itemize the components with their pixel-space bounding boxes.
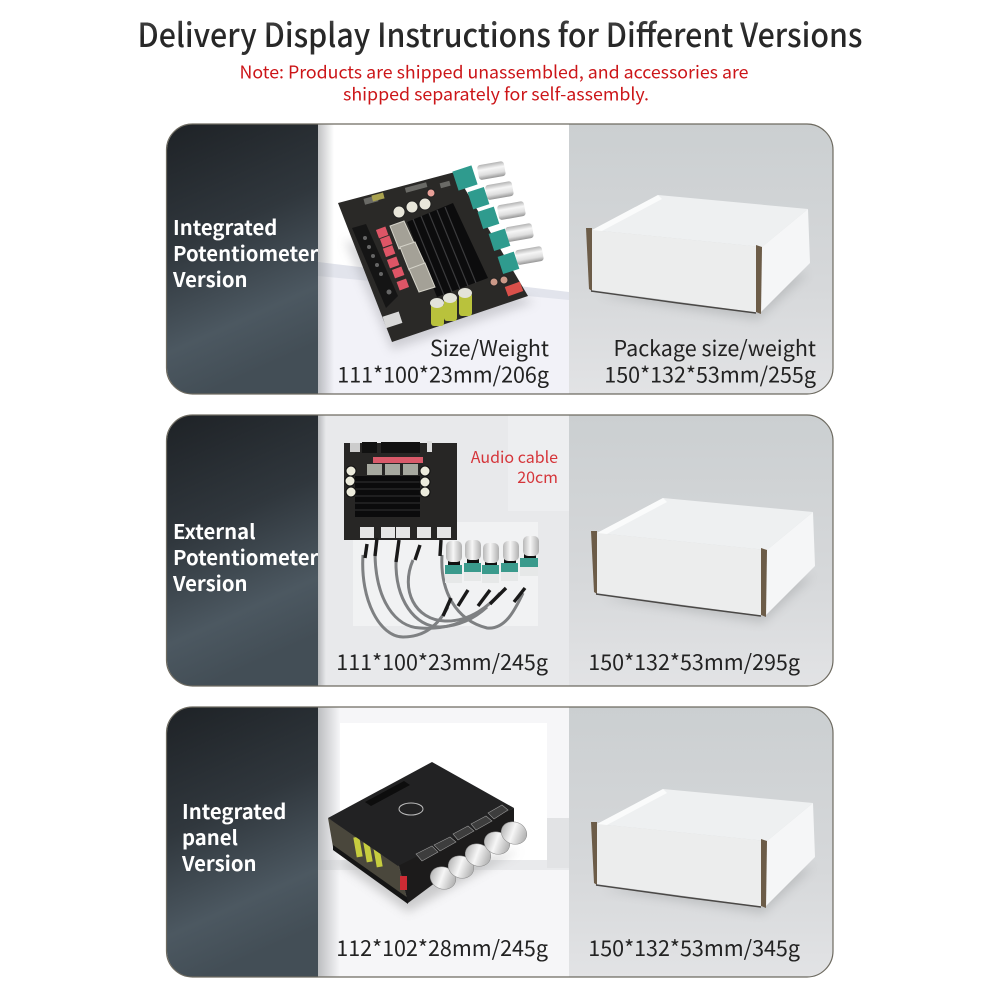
label panel: panel (182, 821, 238, 851)
product photo panel (318, 124, 569, 394)
icon: box (591, 789, 815, 914)
package label: 150*132*53mm/255g (604, 358, 816, 390)
knobs (477, 161, 544, 265)
heatsink (407, 203, 488, 297)
relays (390, 221, 435, 292)
size label: 112*102*28mm/245g (336, 932, 548, 963)
label panel (167, 415, 319, 686)
size label: Size/Weight (430, 332, 549, 363)
callout: audio cable: Audio cable (471, 444, 558, 468)
package label: Package size/weight (614, 332, 816, 363)
potentiometers (452, 165, 519, 274)
red note: Note: Products are shipped unassembled, and accessories are (240, 60, 748, 84)
red switch (400, 876, 407, 890)
title: Delivery Display Instructions for Different Versions (138, 9, 862, 57)
label panel: Potentiometer (173, 237, 319, 267)
red blocks (373, 457, 423, 463)
size label (339, 338, 549, 388)
knobs (427, 818, 530, 893)
package photo panel (569, 707, 833, 977)
red blocks (376, 227, 409, 290)
package photo panel (569, 124, 833, 394)
connectors (360, 527, 451, 538)
size label: 111*100*23mm/245g (336, 646, 548, 677)
package label (606, 338, 816, 388)
red note: shipped separately for self-assembly. (343, 82, 649, 106)
product photo panel (318, 707, 569, 977)
package label: 150*132*53mm/345g (588, 932, 800, 963)
logo (399, 803, 423, 815)
package label: 150*132*53mm/295g (588, 646, 800, 677)
top plate (328, 762, 514, 866)
label panel: Version (172, 263, 248, 293)
package photo panel (569, 415, 833, 686)
label panel: Integrated (182, 795, 286, 825)
callout: audio cable: 20cm (517, 464, 558, 488)
panel scales (416, 805, 508, 861)
label panel: Potentiometer (173, 541, 319, 571)
panel: integrated potentiometer version (167, 124, 833, 394)
panel: integrated panel version (167, 707, 833, 977)
size label: 111*100*23mm/206g (337, 358, 549, 390)
cables (363, 555, 523, 637)
external potentiometers (445, 536, 539, 583)
label panel: External (173, 515, 255, 545)
label panel (167, 124, 319, 394)
capacitors (345, 466, 430, 497)
terminals (352, 224, 398, 308)
board (338, 161, 544, 350)
icon: box (586, 195, 810, 320)
heatsink (355, 476, 420, 517)
front face (398, 808, 514, 903)
terminals (362, 442, 377, 453)
panel: external potentiometer version (167, 415, 833, 686)
device (328, 762, 530, 912)
left open side (328, 818, 408, 903)
board (344, 441, 457, 540)
label panel: Version (172, 567, 248, 597)
product photo panel (318, 415, 569, 686)
callout: audio cable (470, 450, 558, 483)
icon: box (591, 498, 815, 623)
red note (240, 60, 748, 106)
capacitors (393, 189, 508, 286)
relays (367, 464, 418, 475)
label panel (167, 707, 318, 977)
label panel: Integrated (173, 211, 277, 241)
label panel: Version (181, 847, 257, 877)
